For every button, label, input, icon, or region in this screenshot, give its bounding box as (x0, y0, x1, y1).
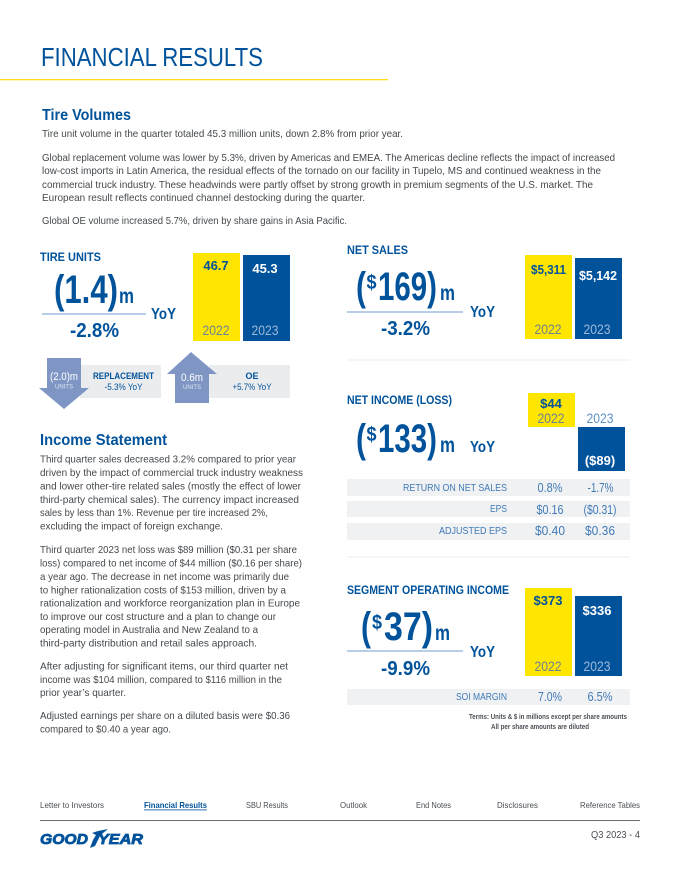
text block: income statement: compared to $0.40 a year ago. (40, 724, 171, 736)
footer navigation: SBU Results (246, 800, 288, 810)
net income heading: NET INCOME (LOSS) (347, 395, 452, 407)
net sales change: $ (366, 272, 376, 294)
callout: replacement (39, 358, 161, 409)
net sales change: ( (356, 265, 367, 309)
bar chart: tire units: 2022 (202, 322, 230, 338)
terms note: Terms: Units & $ in millions except per share amounts (469, 714, 627, 721)
text block: income statement: to improve our cost structure and a plan to change our (40, 612, 276, 623)
footer navigation: Letter to Investors (40, 800, 104, 810)
footer navigation: Financial Results (144, 800, 207, 810)
tire units change: YoY (151, 306, 176, 323)
segment operating income change: -9.9% (381, 658, 430, 680)
net sales heading: NET SALES (347, 245, 408, 257)
terms note: All per share amounts are diluted (491, 724, 589, 731)
segment operating income change: $ (372, 612, 382, 634)
text block: income statement: and lower other-tire related sales (mostly the effect of lower (40, 482, 302, 492)
text block: income statement: After adjusting for significant items, our third quarter net (40, 662, 288, 672)
net sales change: -3.2% (381, 318, 430, 340)
callout: oe: OE (245, 371, 259, 381)
bar chart: net income: $44 (540, 396, 563, 411)
text block: income statement: Adjusted earnings per share on a diluted basis were $0.36 (40, 711, 290, 722)
terms note (469, 714, 627, 731)
text block: income statement: third-party distribution and retail sales approach. (40, 638, 257, 650)
bar chart: segment operating income: $373 (534, 593, 562, 608)
heading: income statement: Income Statement (40, 432, 167, 449)
segment operating income change (347, 605, 495, 680)
bar chart: net sales: 2023 (584, 321, 611, 337)
bar chart: segment operating income: $336 (583, 603, 611, 618)
net income change: YoY (470, 439, 495, 456)
footer navigation (40, 800, 640, 821)
table: returns and eps: -1.7% (588, 480, 614, 495)
segment operating income heading: SEGMENT OPERATING INCOME (347, 585, 509, 597)
heading: tire volumes: Tire Volumes (42, 107, 131, 124)
text block: income statement: Third quarter sales decreased 3.2% compared to prior year (40, 454, 297, 466)
table: returns and eps: ADJUSTED EPS (439, 526, 507, 537)
table: returns and eps (347, 479, 630, 540)
net income change: ( (356, 417, 367, 461)
text block: tire volumes: low-cost imports in Latin America, the residual effects of the tornado on our facility in Tupelo, MS and continued weakness in the (42, 166, 601, 177)
title: FINANCIAL RESULTS (41, 42, 263, 72)
net income change (356, 417, 495, 461)
table: soi margin: SOI MARGIN (456, 692, 507, 703)
tire units change: -2.8% (70, 320, 119, 342)
net sales change: m (440, 282, 455, 305)
logo: goodyear (40, 829, 143, 848)
net sales change (347, 265, 495, 340)
bar chart: net income: 2023 (586, 410, 614, 426)
bar chart: net income (528, 393, 625, 471)
bar chart: net sales (525, 255, 622, 339)
table: returns and eps: EPS (490, 504, 507, 515)
tire units change (42, 268, 176, 342)
panel: segment operating income (347, 585, 630, 731)
callout: replacement: (2.0)m (50, 371, 78, 383)
text block: income statement: excluding the impact of foreign exchange. (40, 522, 223, 532)
text block: income statement: sales by less than 1%. Revenue per tire increased 2%, (40, 508, 268, 519)
callout: oe: +5.7% YoY (232, 382, 272, 392)
bar chart: segment operating income: 2022 (534, 658, 562, 674)
text block: income statement: loss) compared to net income of $44 million ($0.16 per share) (40, 558, 302, 570)
panel: net sales (347, 245, 622, 340)
text block: income statement (40, 454, 303, 736)
segment operating income change: ( (361, 605, 372, 649)
net income change: m (440, 434, 455, 457)
footer navigation: End Notes (416, 800, 451, 810)
segment operating income change: YoY (470, 644, 495, 661)
table: soi margin: 6.5% (588, 689, 613, 704)
page number: Q3 2023 - 4 (591, 829, 640, 841)
text block: tire volumes: Global replacement volume was lower by 5.3%, driven by Americas and EMEA. The Americas decline reflects the impact of increased (42, 153, 615, 164)
tire units change: (1.4) (54, 268, 118, 312)
bar chart: tire units: 45.3 (252, 261, 278, 276)
text block: tire volumes: Tire unit volume in the quarter totaled 45.3 million units, down 2.8% from prior year. (42, 129, 403, 140)
callout: oe: UNITS (183, 384, 202, 391)
bar chart: net sales: $5,142 (579, 268, 617, 283)
net sales change: 169) (378, 265, 437, 309)
bar chart: tire units: 2023 (252, 322, 279, 338)
table: returns and eps: RETURN ON NET SALES (403, 483, 507, 494)
text block: income statement: Third quarter 2023 net loss was $89 million ($0.31 per share (40, 545, 297, 556)
net income change: 133) (378, 417, 437, 461)
segment operating income change: m (435, 622, 450, 645)
bar chart: segment operating income (525, 588, 622, 676)
callout: oe (167, 352, 290, 403)
text block: tire volumes: commercial truck industry. These headwinds were partly offset by strong growth in premium segments of the U.S. market. The (42, 180, 593, 191)
logo: goodyear: GOOD (40, 831, 88, 848)
footer navigation: Outlook (340, 800, 368, 810)
bar chart: tire units: 46.7 (203, 258, 229, 273)
table: returns and eps: 0.8% (538, 480, 563, 495)
table: returns and eps: $0.16 (536, 502, 564, 517)
table: soi margin (347, 689, 630, 705)
bar chart: net income: 2022 (538, 410, 565, 426)
callout: replacement: -5.3% YoY (104, 382, 142, 392)
text block: income statement: prior year’s quarter. (40, 688, 126, 699)
table: returns and eps: ($0.31) (584, 502, 616, 517)
callout: replacement: UNITS (55, 384, 74, 390)
text block: income statement: income was $104 million, compared to $116 million in the (40, 675, 282, 686)
table: returns and eps: $0.40 (535, 523, 565, 538)
bar chart: tire units (193, 253, 290, 341)
footer navigation: Reference Tables (580, 800, 640, 810)
text block: tire volumes (42, 129, 615, 227)
segment operating income change: 37) (384, 605, 433, 649)
tire units change: m (119, 285, 134, 308)
bar chart: net sales: $5,311 (531, 262, 566, 277)
text block: income statement: rationalization and workforce reorganization plan in Europe (40, 598, 300, 610)
panel: tire units (39, 252, 290, 409)
logo: goodyear: YEAR (98, 831, 143, 848)
tire units heading: TIRE UNITS (40, 252, 101, 264)
callout: replacement: REPLACEMENT (93, 371, 154, 381)
text block: income statement: to higher rationalization costs of $153 million, driven by a (40, 586, 286, 596)
text block: income statement: operating model in Australia and New Zealand to a (40, 625, 258, 636)
net income change: $ (366, 424, 376, 446)
panel: net income (347, 393, 630, 540)
callout: oe: 0.6m (181, 372, 203, 384)
table: soi margin: 7.0% (538, 689, 562, 704)
bar chart: net income: ($89) (585, 453, 615, 468)
text block: income statement: a year ago. The decrease in net income was primarily due (40, 572, 289, 583)
text block: income statement: driven by the impact of commercial truck industry weakness (40, 468, 303, 479)
text block: tire volumes: European result reflects continued channel destocking during the quarter. (42, 193, 365, 204)
footer navigation: Disclosures (497, 800, 538, 810)
bar chart: segment operating income: 2023 (584, 658, 611, 674)
net sales change: YoY (470, 304, 495, 321)
text block: income statement: third-party chemical sales). The currency impact increased (40, 495, 299, 506)
table: returns and eps: $0.36 (585, 523, 615, 538)
bar chart: net sales: 2022 (534, 321, 562, 337)
text block: tire volumes: Global OE volume increased 5.7%, driven by share gains in Asia Pacific. (42, 216, 347, 227)
